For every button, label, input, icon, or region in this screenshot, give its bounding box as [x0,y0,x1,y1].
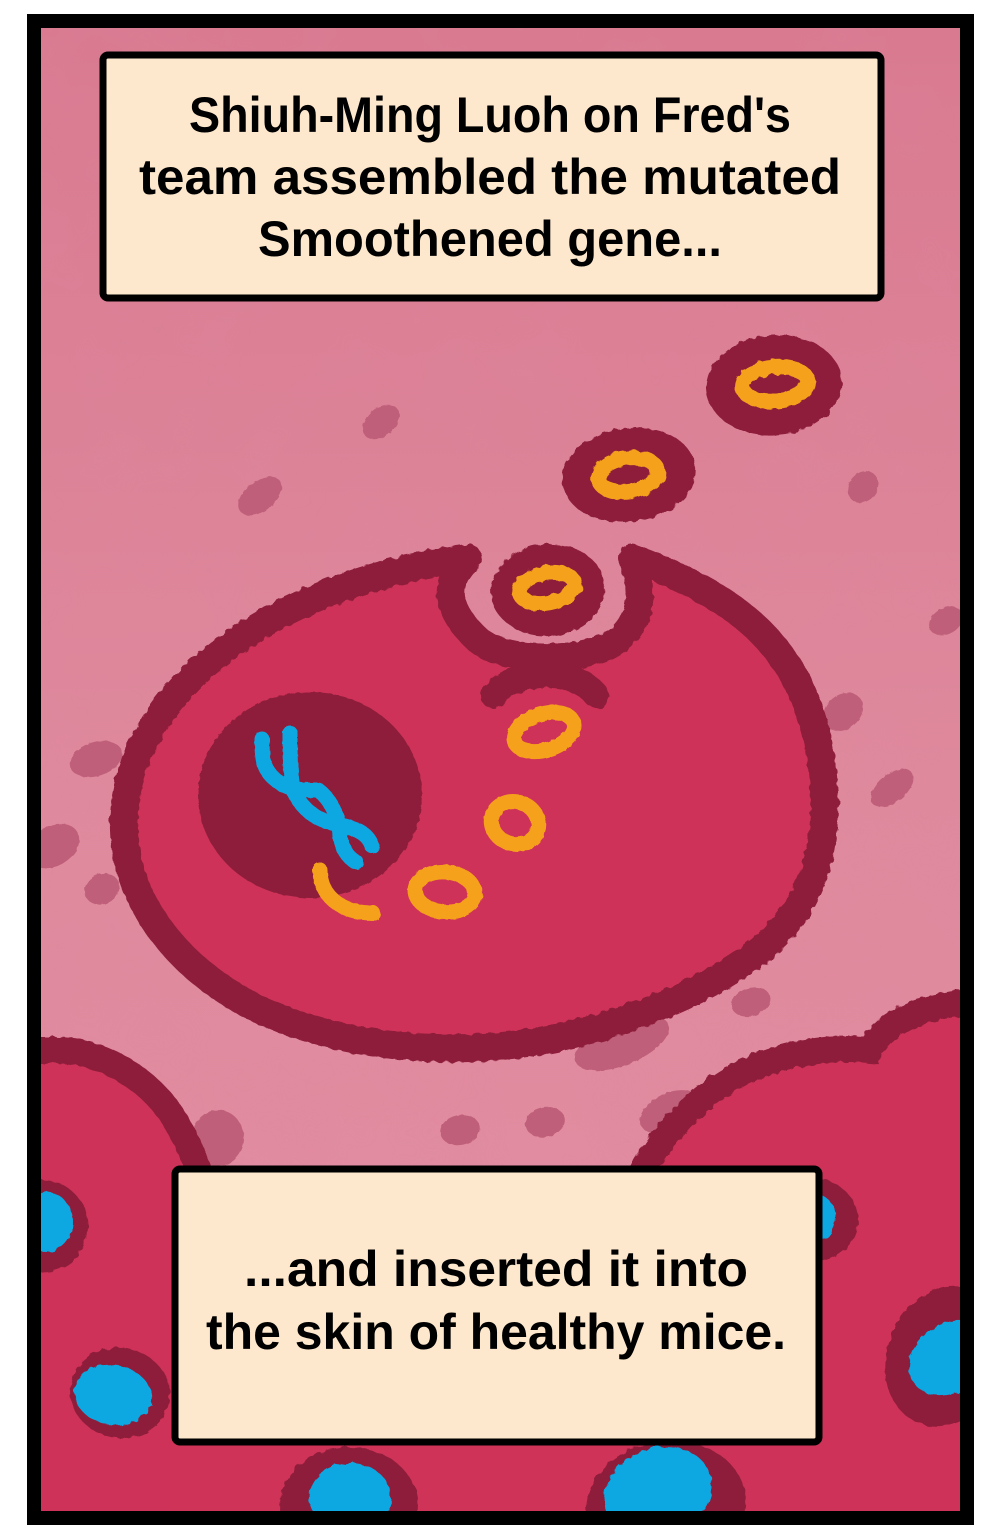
caption: bottom: ...and inserted it into [244,1241,748,1297]
icon: gene fragment [320,870,373,913]
icon: virus entering cell [490,542,606,636]
caption: top: Smoothened gene... [258,211,722,267]
icon: virus top [706,334,843,436]
nucleus [198,692,422,898]
caption: top: team assembled the mutated [139,149,841,205]
nuclei of surrounding cells [41,1179,960,1511]
main cell [124,558,824,1048]
background tissue [41,28,960,1166]
bottom left cell [41,1035,211,1511]
receptor arc under the notch [493,675,596,695]
icon: gene rings inside cell [413,705,579,915]
background specks [19,398,968,1166]
caption: bottom [175,1169,819,1442]
caption: top: Shiuh-Ming Luoh on Fred's [189,87,791,143]
icon: virus middle [562,427,696,523]
bottom right cell [630,989,960,1511]
caption: top [103,55,881,298]
bottom tissue fill [200,1446,644,1511]
icon: DNA strand [262,733,372,862]
caption: bottom: the skin of healthy mice. [206,1304,786,1360]
